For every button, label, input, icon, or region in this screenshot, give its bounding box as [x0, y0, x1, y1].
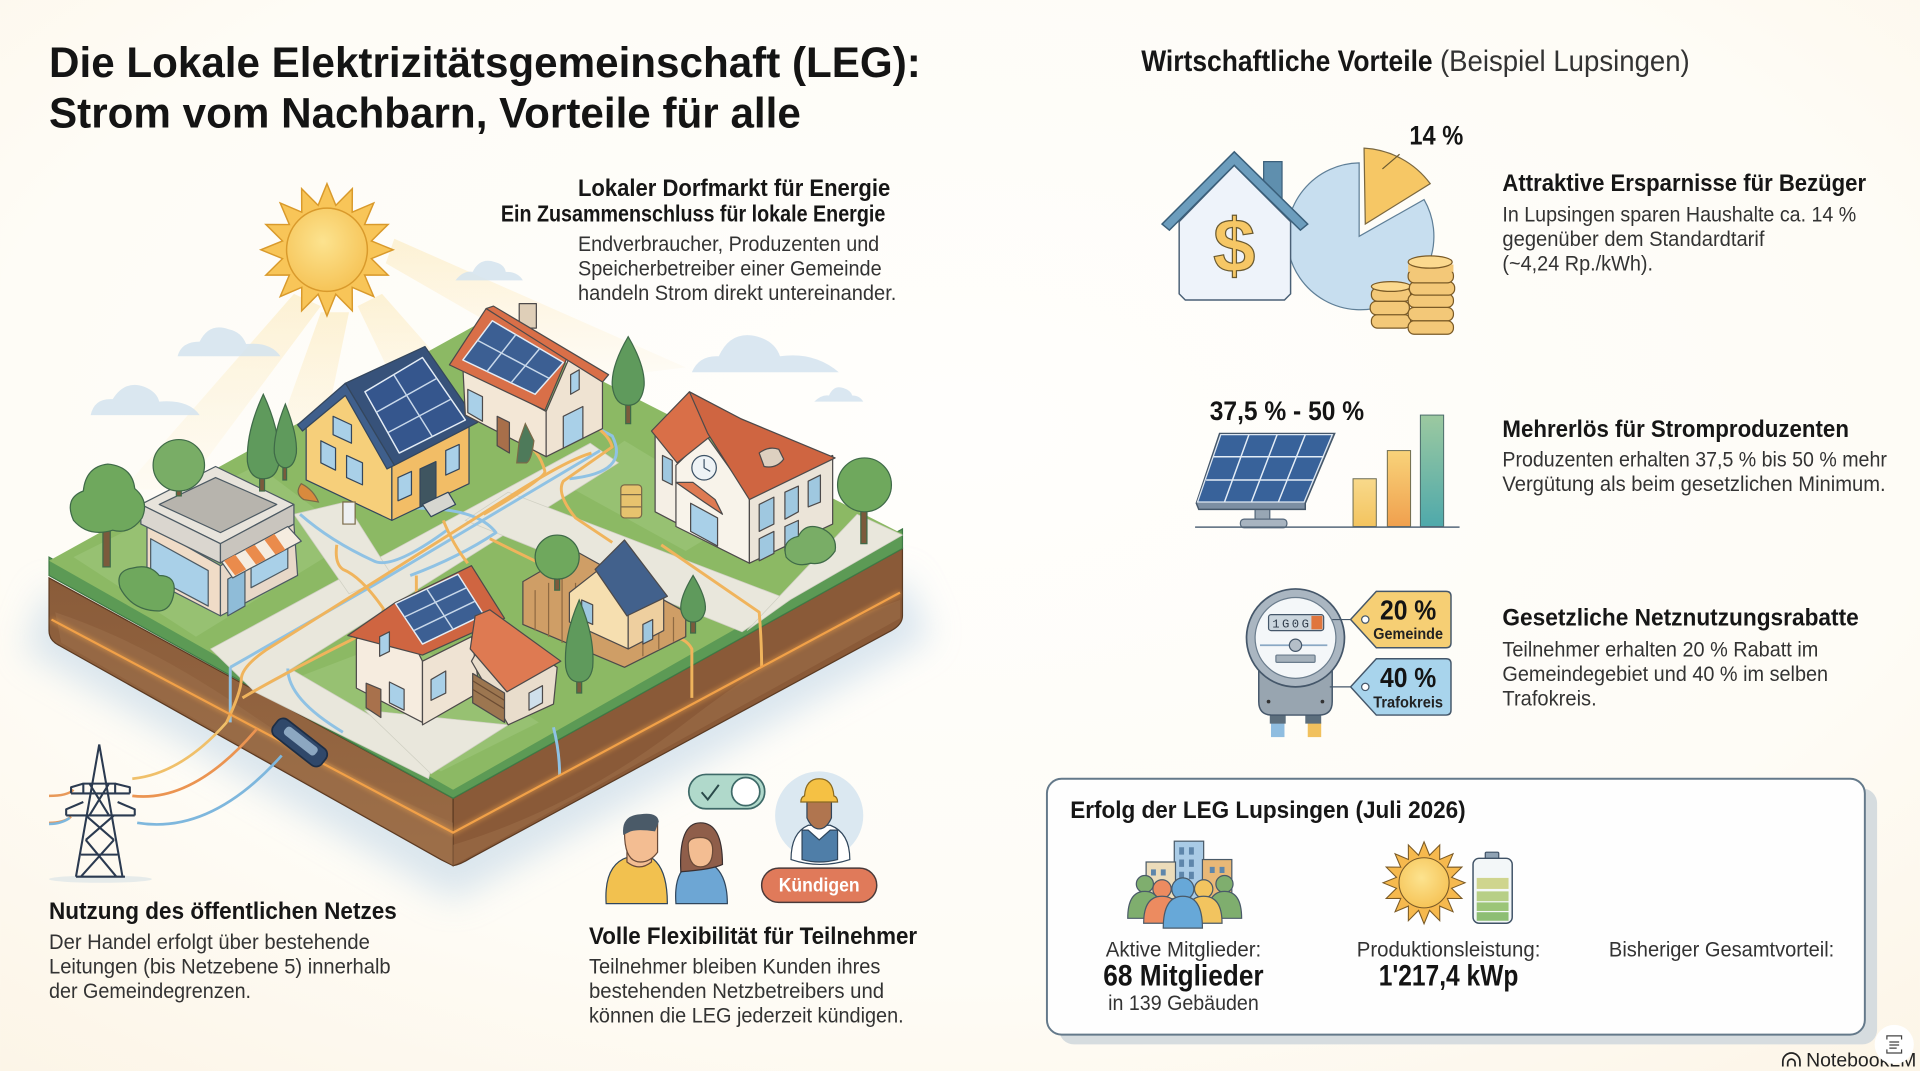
heading: economic benefits: Wirtschaftliche Vorteile [1141, 45, 1433, 78]
icon: solar panel and bars: 37,5 % - 50 % [1210, 396, 1364, 426]
text: grid discounts [1502, 605, 1859, 710]
text: flexibility: Teilnehmer bleiben Kunden ihres [589, 955, 880, 978]
illustration: sun [261, 184, 393, 316]
icon: meter with discount tags: Gemeinde [1373, 626, 1443, 643]
coins [1370, 256, 1455, 334]
text: grid discounts: Trafokreis. [1502, 687, 1597, 710]
illustration: shop with awning [141, 467, 301, 616]
bars [1353, 479, 1376, 527]
text: flexibility: bestehenden Netzbetreibers und [589, 980, 884, 1003]
lighter lawn patches [74, 441, 747, 771]
house [1264, 162, 1282, 208]
panel: success of LEG Lupsingen: 68 Mitglieder [1103, 960, 1264, 993]
solar panel [1255, 503, 1270, 520]
illustration: large house with clock [651, 392, 835, 563]
illustration: trees center [535, 535, 705, 693]
text: local market: Endverbraucher, Produzenten und [578, 233, 879, 256]
text: savings [1502, 170, 1866, 276]
text: local market: Lokaler Dorfmarkt für Energie [578, 175, 890, 202]
meter pipes [1271, 722, 1284, 737]
panel: success of LEG Lupsingen: Aktive Mitglieder: [1106, 938, 1261, 961]
icon: meter with discount tags [1247, 589, 1451, 737]
panel: success of LEG Lupsingen: Bisheriger Gesamtvorteil: [1609, 938, 1834, 961]
icon: meter with discount tags: 20 % [1380, 595, 1436, 626]
panel: success of LEG Lupsingen: 1'217,4 kWp [1379, 960, 1518, 993]
text: local market: handeln Strom direkt untereinander. [578, 282, 896, 305]
woman [676, 863, 727, 904]
pylon frame [66, 744, 135, 877]
icon: house, pie chart and coins: $ [1213, 204, 1255, 289]
text: public grid: Leitungen (bis Netzebene 5) innerhalb [49, 955, 391, 978]
illustration: trees right [785, 458, 891, 565]
illustration: yellow house with solar roof [298, 347, 478, 520]
icon: scan button [1875, 1025, 1914, 1064]
text: public grid: der Gemeindegrenzen. [49, 980, 251, 1003]
platform shadow [25, 575, 931, 900]
text: savings: gegenüber dem Standardtarif [1502, 228, 1765, 251]
illustration: tree right of cream house [612, 337, 644, 424]
text: producers: Mehrerlös für Stromproduzenten [1502, 416, 1849, 443]
icon: people, toggle and cancel button [606, 771, 877, 904]
text: grid discounts: Gesetzliche Netznutzungsrabatte [1502, 605, 1859, 632]
grass edge [49, 529, 902, 798]
pylon lines [49, 790, 74, 823]
discount connector lines [1330, 620, 1351, 687]
discount tag 40 % [1351, 659, 1451, 715]
man [606, 857, 667, 904]
text: producers: Vergütung als beim gesetzlichen Minimum. [1502, 473, 1886, 496]
soil left face [49, 578, 453, 866]
text: savings: (~4,24 Rp./kWh). [1502, 253, 1653, 276]
text: savings: In Lupsingen sparen Haushalte ca. 14 % [1502, 204, 1856, 227]
illustration: trees left [70, 394, 296, 611]
illustration: isometric village block [25, 321, 931, 900]
illustration: cream house with orange roof [449, 304, 609, 457]
text: grid discounts: Gemeindegebiet und 40 % im selben [1502, 663, 1828, 686]
roads [211, 443, 902, 779]
illustration: pylon with lines [49, 722, 282, 883]
text: producers: Produzenten erhalten 37,5 % bis 50 % mehr [1502, 449, 1887, 472]
soil strata [55, 612, 453, 866]
panel: success of LEG Lupsingen [1047, 779, 1877, 1044]
text: local market: Speicherbetreiber einer Gemeinde [578, 257, 882, 280]
text: grid discounts: Teilnehmer erhalten 20 % Rabatt im [1502, 638, 1818, 661]
text: local market [501, 175, 896, 305]
glowing underground cable [51, 593, 900, 833]
soil right face [453, 549, 902, 866]
worker [775, 771, 863, 860]
icon: meter with discount tags: 40 % [1380, 662, 1436, 693]
heading: economic benefits: (Beispiel Lupsingen) [1440, 45, 1690, 78]
icon: people, toggle and cancel button: Kündigen [779, 874, 860, 896]
illustration: front house with garage [348, 566, 561, 725]
orange power lines [227, 416, 762, 722]
icon: house, pie chart and coins [1162, 120, 1463, 334]
icon: meter with discount tags: 1G0G [1272, 618, 1309, 632]
cancel button [762, 868, 877, 902]
title: Strom vom Nachbarn, Vorteile für alle [49, 89, 801, 137]
illustration: small house with fence [523, 540, 686, 667]
text: flexibility: Volle Flexibilität für Teilnehmer [589, 923, 918, 950]
pie chart [1287, 163, 1434, 310]
blue power lines [230, 416, 617, 775]
icon: meter with discount tags: Trafokreis [1373, 695, 1443, 712]
icon: buildings and people [1128, 841, 1242, 928]
panel: success of LEG Lupsingen: Produktionsleistung: [1357, 938, 1540, 961]
text: flexibility: können die LEG jederzeit kündigen. [589, 1004, 904, 1027]
discount tag 20 % [1351, 591, 1451, 648]
panel heading: Erfolg der LEG Lupsingen (Juli 2026) [1070, 797, 1466, 824]
illustration: clouds [91, 261, 863, 415]
text: producers [1502, 416, 1887, 496]
illustration: sun rays [122, 239, 686, 490]
text: public grid: Der Handel erfolgt über bestehende [49, 931, 370, 954]
panel: success of LEG Lupsingen: in 139 Gebäuden [1108, 992, 1259, 1015]
icon: solar panel and bars [1195, 396, 1460, 528]
title: Die Lokale Elektrizitätsgemeinschaft (LEG): [49, 39, 921, 87]
meter body [1259, 655, 1332, 715]
illustration: battery barrel [298, 424, 642, 524]
icon: sun and battery [1383, 842, 1512, 924]
text: public grid [49, 898, 397, 1003]
heading: economic benefits [1141, 45, 1690, 78]
illustration: underground junction box [269, 715, 330, 770]
text: public grid: Nutzung des öffentlichen Netzes [49, 898, 397, 925]
toggle [689, 774, 765, 809]
text: flexibility [589, 923, 918, 1027]
grass top [49, 321, 902, 790]
icon: house, pie chart and coins: 14 % [1409, 120, 1463, 150]
watermark: NotebookLM: NotebookLM [1806, 1049, 1916, 1071]
title [49, 39, 921, 137]
text: savings: Attraktive Ersparnisse für Bezüger [1502, 170, 1866, 197]
text: local market: Ein Zusammenschluss für lokale Energie [501, 201, 885, 227]
